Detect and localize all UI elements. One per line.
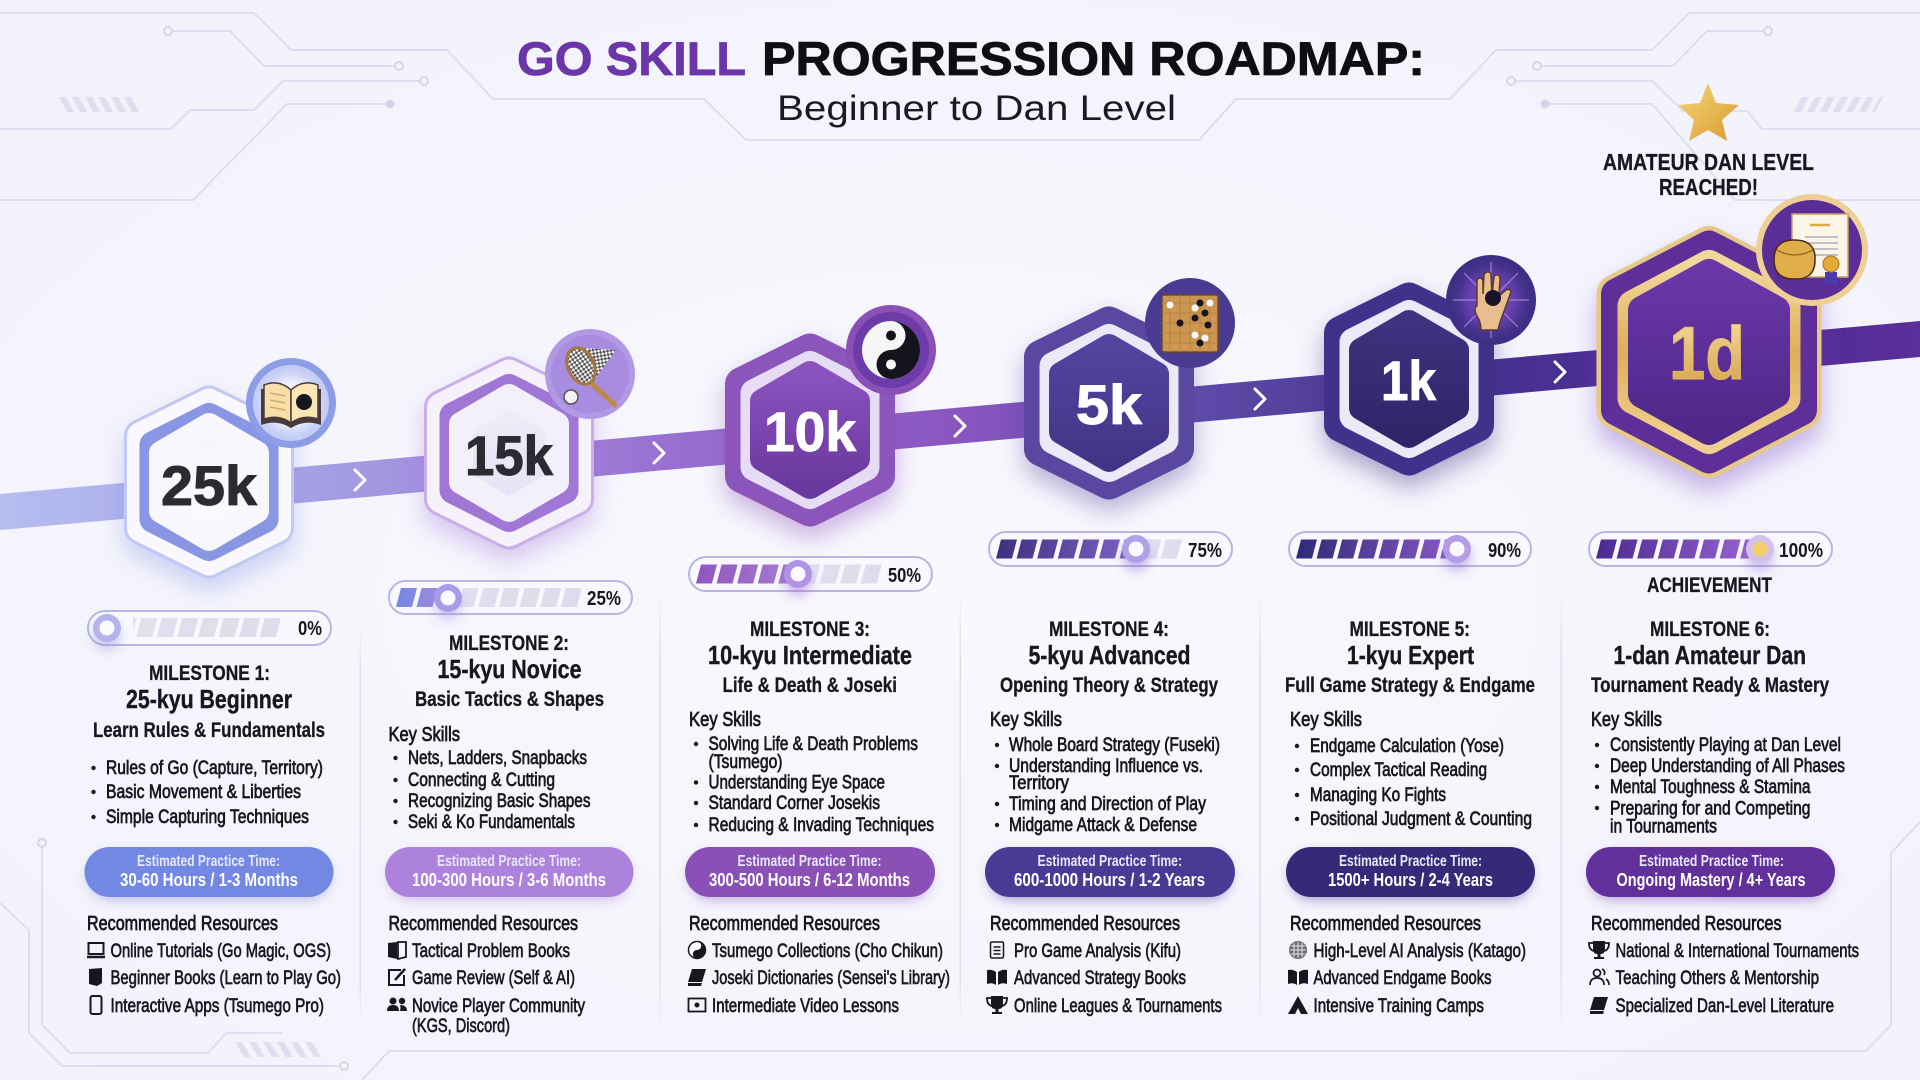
milestone heading: Full Game Strategy & Endgame (1285, 674, 1535, 697)
recommended resources (1288, 913, 1526, 1017)
achievement star (1678, 83, 1739, 141)
key skills list (689, 709, 934, 836)
recommended resources: Interactive Apps (Tsumego Pro) (110, 996, 324, 1017)
recommended resources: Intermediate Video Lessons (712, 996, 899, 1017)
key skills list: Consistently Playing at Dan Level (1610, 735, 1841, 756)
key skills list: Managing Ko Fights (1310, 785, 1446, 806)
key skills list: Endgame Calculation (Yose) (1310, 736, 1504, 757)
milestone hexagon: 15k (441, 329, 635, 544)
practice time pill: Estimated Practice Time: (1639, 853, 1784, 870)
progress bar 90%: 90% (1488, 540, 1521, 562)
column dividers (360, 590, 1562, 1030)
milestone hexagon: 1d: 1d (1669, 311, 1745, 395)
practice time pill: Estimated Practice Time: (1038, 853, 1182, 870)
key skills list: Deep Understanding of All Phases (1610, 756, 1845, 777)
icon: hand holding stone (1446, 255, 1536, 345)
skills list (91, 758, 323, 828)
practice time pill: 300-500 Hours / 6-12 Months (709, 869, 910, 890)
practice time pill (385, 847, 634, 900)
practice time pill: 100-300 Hours / 3-6 Months (412, 869, 606, 890)
achievement caption (1603, 149, 1814, 200)
key skills list: (Tsumego) (708, 752, 782, 773)
icon: book (89, 968, 102, 986)
key skills list: Territory (1009, 773, 1069, 794)
milestone heading (1591, 618, 1829, 697)
key skills list: Whole Board Strategy (Fuseki) (1009, 735, 1220, 756)
key skills list (990, 709, 1220, 836)
achievement label: ACHIEVEMENT (1647, 574, 1772, 597)
icon: edit (389, 969, 405, 985)
milestone hexagon: 5k (1041, 278, 1235, 494)
title (517, 32, 1425, 128)
practice time pill (685, 847, 935, 900)
milestone heading: MILESTONE 2: (449, 632, 569, 655)
milestone heading: 1-dan Amateur Dan (1614, 640, 1806, 670)
recommended resources: Recommended Resources (388, 913, 578, 935)
icon: yin yang (846, 305, 936, 395)
icon: community (387, 998, 407, 1011)
progress bar 75%: 75% (1188, 540, 1222, 562)
milestone heading: Life & Death & Joseki (722, 674, 897, 697)
progress bar 0%: 0% (298, 618, 322, 640)
icon: capture net (545, 329, 635, 419)
panel: milestone 2 (385, 581, 634, 1037)
recommended resources (1589, 913, 1859, 1017)
recommended resources: High-Level AI Analysis (Katago) (1314, 941, 1526, 962)
recommended resources: Advanced Strategy Books (1014, 968, 1186, 989)
milestone hexagon: 25k (141, 358, 336, 574)
recommended resources (387, 913, 585, 1037)
milestone heading: 10-kyu Intermediate (708, 640, 912, 670)
title: PROGRESSION ROADMAP: (762, 32, 1425, 85)
recommended resources: Joseki Dictionaries (Sensei's Library) (712, 968, 950, 989)
milestone hexagon: 1k: 1k (1381, 349, 1437, 412)
recommended resources: Recommended Resources (689, 913, 880, 935)
title: Beginner to Dan Level (777, 89, 1176, 128)
practice time pill: Ongoing Mastery / 4+ Years (1616, 869, 1806, 890)
milestone heading: MILESTONE 4: (1049, 618, 1169, 641)
milestone heading: MILESTONE 6: (1650, 618, 1770, 641)
icon: trophy (1589, 941, 1609, 959)
recommended resources: Novice Player Community (412, 996, 585, 1017)
practice time pill (985, 847, 1235, 900)
key skills list: Reducing & Invading Techniques (708, 815, 934, 836)
key skills list: Midgame Attack & Defense (1009, 815, 1197, 836)
icon: open book with stone (246, 358, 336, 448)
key skills list: Solving Life & Death Problems (708, 734, 918, 755)
practice time pill (84, 847, 334, 900)
progress bar 0% (88, 611, 331, 649)
key skills list (388, 724, 590, 833)
achievement caption: AMATEUR DAN LEVEL (1603, 149, 1814, 175)
icon: video (688, 998, 706, 1012)
icon: game record (990, 942, 1004, 958)
practice time pill: 600-1000 Hours / 1-2 Years (1014, 869, 1205, 890)
skills list: Rules of Go (Capture, Territory) (106, 758, 323, 779)
panel: milestone 5 (1285, 532, 1535, 1017)
key skills list: Timing and Direction of Play (1009, 794, 1206, 815)
practice time pill: Estimated Practice Time: (137, 853, 280, 870)
milestone heading: Learn Rules & Fundamentals (93, 719, 325, 742)
recommended resources: Game Review (Self & AI) (412, 968, 575, 989)
progress bar 75% (989, 532, 1232, 570)
milestone heading: MILESTONE 5: (1350, 618, 1470, 641)
recommended resources: Recommended Resources (87, 913, 278, 935)
milestone hexagon: 25k: 25k (161, 454, 258, 517)
practice time pill (1586, 847, 1835, 900)
recommended resources: Online Tutorials (Go Magic, OGS) (110, 941, 331, 962)
key skills list: Nets, Ladders, Snapbacks (408, 748, 587, 769)
milestone heading (93, 662, 325, 742)
progress bar 50% (689, 557, 932, 595)
icon: phone (90, 996, 102, 1014)
recommended resources: Recommended Resources (990, 913, 1180, 935)
recommended resources: Pro Game Analysis (Kifu) (1014, 941, 1181, 962)
progress bar 100%: 100% (1779, 540, 1823, 562)
recommended resources: Specialized Dan-Level Literature (1616, 996, 1834, 1017)
key skills list (1591, 709, 1845, 838)
milestone heading (1000, 618, 1218, 697)
panel: milestone 3 (685, 557, 950, 1017)
recommended resources: (KGS, Discord) (412, 1016, 510, 1037)
recommended resources: Intensive Training Camps (1314, 996, 1484, 1017)
key skills list: Key Skills (990, 709, 1062, 731)
progress bar 25% (389, 581, 632, 619)
roadmap band (0, 321, 1920, 530)
title: GO SKILL (517, 32, 746, 85)
key skills list: Standard Corner Josekis (708, 793, 880, 814)
icon: yin yang small (688, 942, 706, 958)
practice time pill: 1500+ Hours / 2-4 Years (1328, 869, 1493, 890)
key skills list: in Tournaments (1610, 816, 1717, 838)
milestone hexagon: 10k (742, 305, 936, 522)
panel: milestone 4 (985, 532, 1235, 1017)
recommended resources: Recommended Resources (1290, 913, 1481, 935)
milestone heading: 25-kyu Beginner (126, 684, 292, 714)
practice time pill: Estimated Practice Time: (437, 853, 581, 870)
recommended resources: National & International Tournaments (1616, 941, 1859, 962)
recommended resources: Online Leagues & Tournaments (1014, 996, 1222, 1017)
skills list: Basic Movement & Liberties (106, 782, 301, 803)
milestone heading: Tournament Ready & Mastery (1591, 674, 1829, 697)
icon: tent (1288, 996, 1308, 1014)
milestone hexagon: 1k (1341, 255, 1536, 470)
recommended resources (87, 913, 341, 1017)
recommended resources: Advanced Endgame Books (1314, 968, 1492, 989)
key skills list: Positional Judgment & Counting (1310, 809, 1532, 830)
key skills list: Seki & Ko Fundamentals (408, 812, 575, 833)
key skills list: Mental Toughness & Stamina (1610, 777, 1811, 798)
milestone hexagon: 1d (1616, 194, 1868, 472)
icon: dictionary (688, 969, 706, 986)
key skills list: Understanding Influence vs. (1009, 756, 1203, 777)
key skills list: Key Skills (1591, 709, 1662, 731)
recommended resources: Recommended Resources (1591, 913, 1782, 935)
milestone heading: 5-kyu Advanced (1028, 640, 1190, 670)
key skills list (1290, 709, 1532, 830)
icon: literature (1590, 997, 1608, 1014)
arrows along roadmap (355, 362, 1565, 490)
recommended resources: Tsumego Collections (Cho Chikun) (712, 941, 943, 962)
key skills list: Understanding Eye Space (708, 772, 885, 794)
icon: laptop (87, 943, 105, 957)
milestone heading: Opening Theory & Strategy (1000, 674, 1218, 697)
recommended resources (987, 913, 1222, 1017)
icon: certificate and gold bowl (1756, 194, 1868, 306)
practice time pill: Estimated Practice Time: (738, 853, 882, 870)
recommended resources: Beginner Books (Learn to Play Go) (110, 968, 341, 989)
skills list: Simple Capturing Techniques (106, 807, 309, 828)
milestone heading: MILESTONE 1: (149, 662, 270, 685)
icon: mentorship (1590, 969, 1609, 985)
key skills list: Recognizing Basic Shapes (408, 791, 590, 812)
milestone heading (1285, 618, 1535, 697)
practice time pill: Estimated Practice Time: (1339, 853, 1482, 870)
icon: neural network (1289, 941, 1307, 959)
progress bar 50%: 50% (888, 565, 921, 587)
key skills list: Key Skills (1290, 709, 1362, 731)
milestone heading: 1-kyu Expert (1347, 640, 1474, 670)
key skills list: Complex Tactical Reading (1310, 760, 1487, 781)
progress bar 100% (1589, 532, 1832, 570)
recommended resources: Teaching Others & Mentorship (1616, 968, 1819, 989)
milestone heading (415, 632, 604, 711)
recommended resources: Tactical Problem Books (412, 941, 570, 962)
milestone heading: Basic Tactics & Shapes (415, 688, 604, 711)
recommended resources (688, 913, 950, 1017)
key skills list: Key Skills (689, 709, 761, 731)
icon: open book (987, 970, 1007, 985)
key skills list: Preparing for and Competing (1610, 798, 1810, 820)
key skills list: Connecting & Cutting (408, 770, 555, 791)
progress bar 25%: 25% (587, 588, 621, 610)
key skills list: Key Skills (388, 724, 460, 746)
icon: trophy (987, 996, 1007, 1014)
icon: open book (388, 942, 406, 959)
milestone heading (708, 618, 912, 697)
milestone hexagon: 15k: 15k (465, 424, 554, 487)
icon: go board (1145, 278, 1235, 368)
milestone heading: 15-kyu Novice (438, 654, 582, 684)
practice time pill: 30-60 Hours / 1-3 Months (120, 869, 298, 890)
milestone hexagon: 10k: 10k (764, 400, 857, 463)
icon: open book (1288, 970, 1308, 985)
progress bar 90% (1289, 532, 1531, 570)
milestone hexagon: 5k: 5k (1076, 373, 1143, 436)
panel: milestone 1 (84, 611, 341, 1017)
panel: milestone 6 (1586, 532, 1859, 1017)
achievement caption: REACHED! (1659, 174, 1758, 200)
milestone heading: MILESTONE 3: (750, 618, 870, 641)
practice time pill (1286, 847, 1535, 900)
